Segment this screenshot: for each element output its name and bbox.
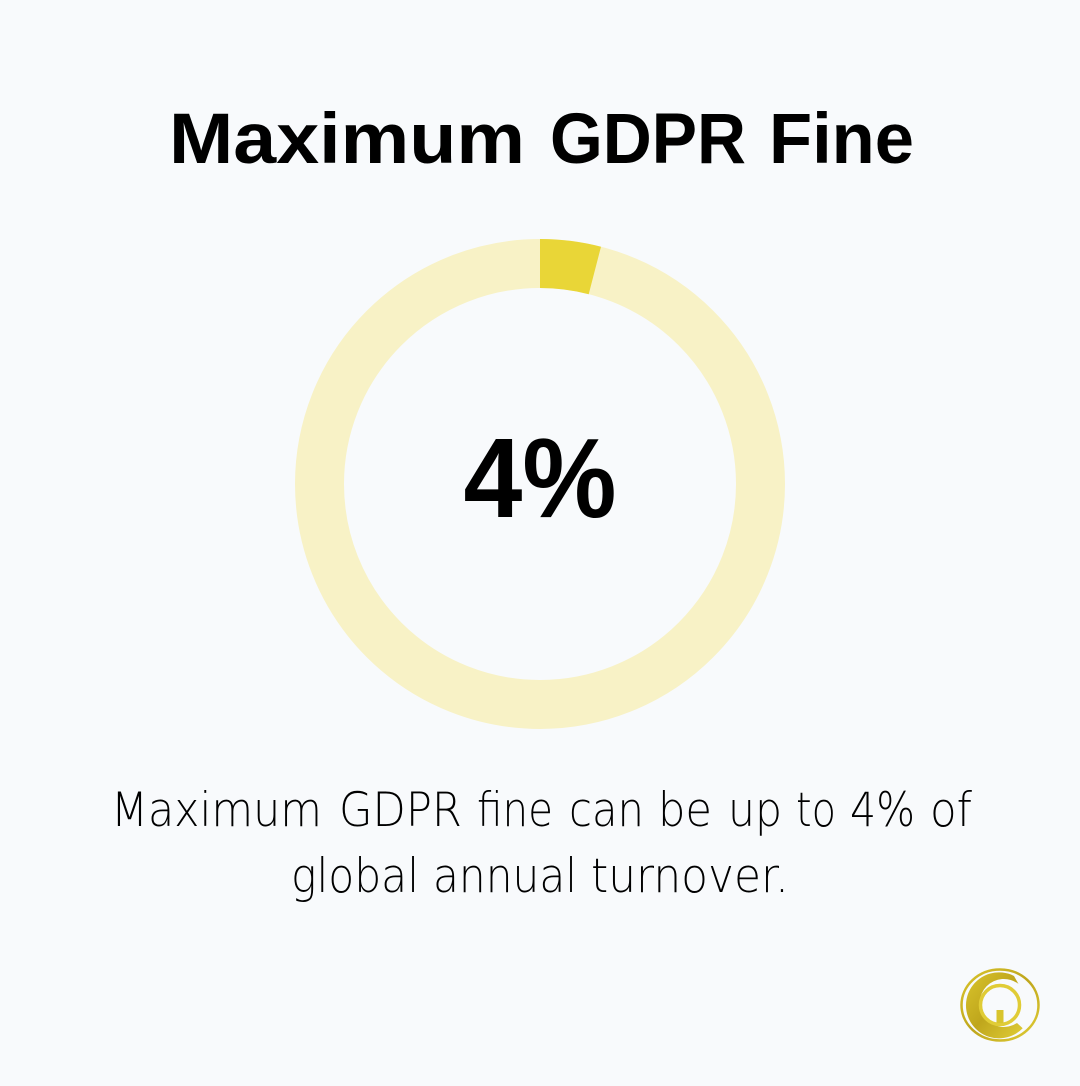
description: global [291, 849, 419, 904]
description: annual [433, 849, 577, 904]
description: of [930, 783, 972, 838]
description: Maximum [111, 783, 322, 838]
icon: gold CQ logo [962, 970, 1038, 1040]
donut segment: 4% [540, 239, 601, 294]
title [169, 100, 914, 179]
description: to [796, 783, 836, 838]
donut track [320, 264, 760, 704]
description: turnover. [591, 849, 789, 904]
center value: 4% [464, 415, 616, 541]
description: up [728, 783, 782, 838]
description: be [658, 783, 712, 838]
description: fine [477, 783, 553, 838]
title: Fine [769, 100, 914, 179]
title: Maximum [169, 100, 525, 179]
description: GDPR [339, 783, 462, 838]
description [111, 783, 972, 904]
description: 4% [850, 783, 915, 838]
donut chart: 4% [320, 239, 760, 704]
description: can [569, 783, 644, 838]
title: GDPR [550, 100, 746, 179]
